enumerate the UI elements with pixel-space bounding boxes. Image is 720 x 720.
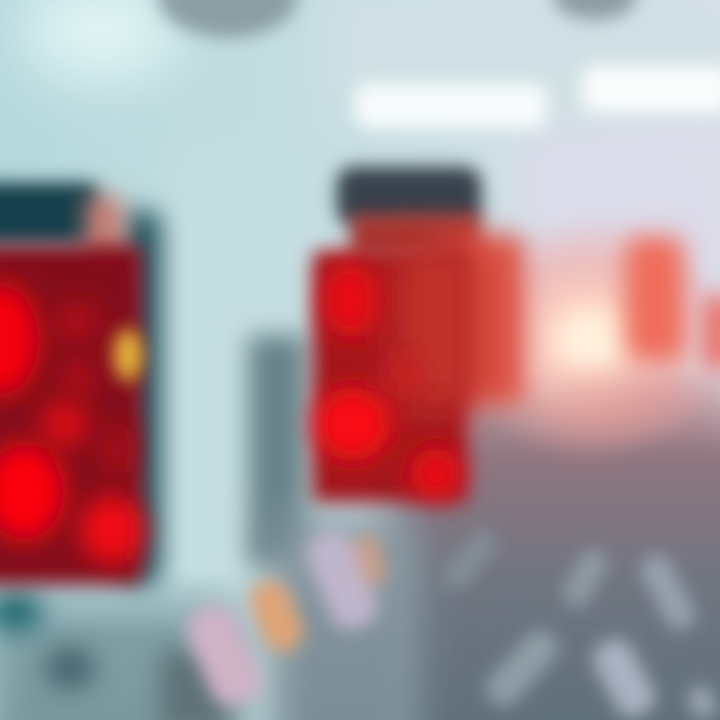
bottle body — [0, 245, 142, 585]
pill: orange — [244, 575, 308, 657]
bottle: centre — [312, 166, 524, 502]
pill: grey right 3 — [636, 550, 700, 634]
pill: grey right 4 — [480, 624, 564, 712]
pill spots — [314, 262, 462, 500]
glow: bright light behind bottles — [455, 215, 720, 465]
scattered pills — [179, 525, 719, 720]
pill: grey right 6 — [685, 683, 719, 720]
pill: grey right 1 — [438, 526, 502, 594]
bottle shadow side — [122, 210, 162, 585]
ceiling lamps — [158, 0, 637, 38]
bottle: left foreground — [0, 182, 162, 585]
red bottles in background — [550, 236, 720, 422]
bottle body — [312, 250, 467, 502]
ceiling light strips — [355, 66, 720, 128]
bottle body right translucent — [440, 235, 524, 405]
back counter and floor haze — [0, 335, 720, 720]
pill: grey right 2 — [558, 545, 612, 611]
pill: pink — [179, 598, 269, 714]
bottle cap — [336, 166, 482, 226]
pill: peach — [350, 531, 390, 589]
bottle cap — [0, 182, 100, 244]
pill: lilac — [300, 525, 384, 635]
bottle shoulder — [350, 215, 480, 255]
pill: pale right 5 — [588, 633, 660, 720]
pill spots — [0, 284, 144, 564]
